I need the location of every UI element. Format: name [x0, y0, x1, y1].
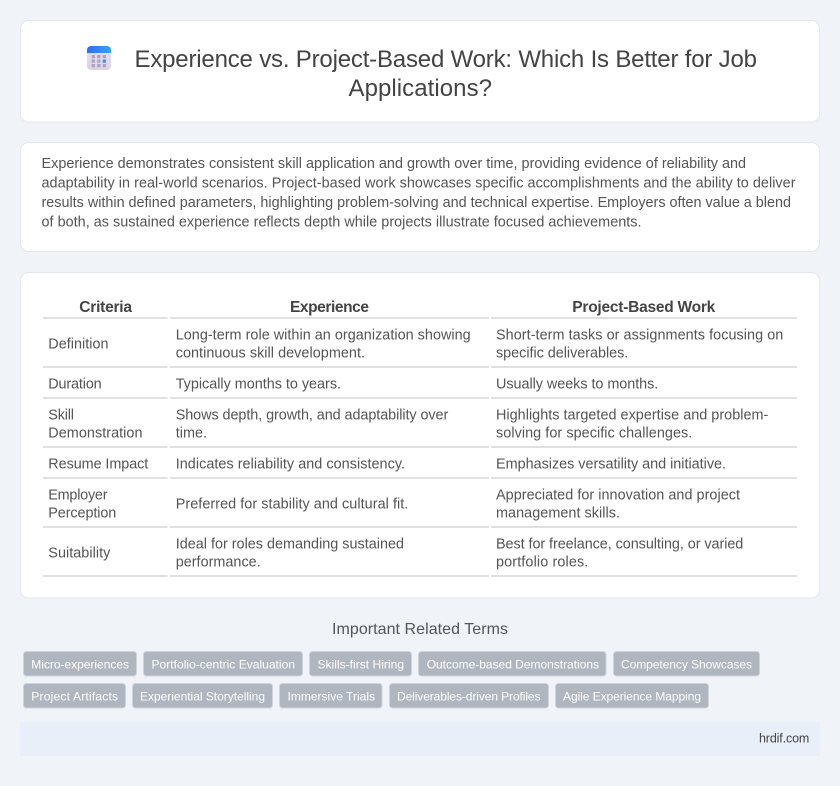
table row: definition: Definition — [48, 336, 108, 352]
table row: employer perception: Perception — [48, 505, 116, 521]
panel: comparison table — [20, 272, 820, 598]
table row: skill demonstration: Highlights targeted expertise and problem- — [496, 407, 769, 423]
table row: skill demonstration: Shows depth, growth, and adaptability over — [176, 407, 449, 423]
text block: introduction paragraph — [42, 156, 796, 230]
tag: skills-first hiring — [310, 652, 412, 676]
title — [134, 46, 757, 102]
table row: employer perception: Appreciated for innovation and project — [496, 487, 740, 503]
footer: hrdif.com — [759, 732, 809, 746]
table row: definition — [43, 327, 797, 368]
tag: portfolio-centric evaluation: Portfolio-centric Evaluation — [152, 657, 295, 671]
table row: employer perception: Preferred for stability and cultural fit. — [176, 496, 408, 512]
table header row: Experience — [290, 299, 369, 316]
text block: introduction paragraph: of both, as sustained experience reflects depth while projects illustrate focused achievements. — [42, 214, 642, 230]
table row: definition: continuous skill development. — [176, 345, 365, 361]
table row: resume impact: Indicates reliability and consistency. — [176, 456, 405, 472]
table row: resume impact: Emphasizes versatility and initiative. — [496, 456, 726, 472]
tag: immersive trials — [280, 684, 382, 708]
table row: suitability: Suitability — [48, 545, 111, 561]
text block: introduction paragraph: Experience demonstrates consistent skill application and growth over time, providing evidence of reliability and — [42, 156, 746, 172]
table row: skill demonstration: solving for specific challenges. — [496, 425, 692, 441]
title: Applications? — [348, 75, 492, 102]
table row: resume impact — [43, 456, 797, 479]
tag: deliverables-driven profiles — [390, 684, 548, 708]
table row: resume impact: Resume Impact — [48, 456, 148, 472]
tag: deliverables-driven profiles: Deliverables-driven Profiles — [397, 689, 540, 703]
title: Experience vs. Project-Based Work: Which Is Better for Job — [134, 46, 757, 73]
text block: introduction paragraph: adaptability in real-world scenarios. Project-based work showcases specific accomplishments and the ability to deliver — [42, 176, 796, 192]
tag: competency showcases — [614, 652, 760, 676]
table row: definition: specific deliverables. — [496, 345, 628, 361]
table row: skill demonstration: Skill — [48, 407, 74, 423]
table row: duration — [43, 376, 797, 399]
footer — [20, 722, 820, 756]
tag: micro-experiences: Micro-experiences — [31, 657, 129, 671]
tag: immersive trials: Immersive Trials — [288, 689, 375, 703]
table row: duration: Typically months to years. — [176, 376, 341, 392]
table header row: Project-Based Work — [572, 299, 716, 316]
table row: suitability: performance. — [176, 554, 261, 570]
table row: suitability — [43, 536, 797, 577]
tag: competency showcases: Competency Showcases — [621, 657, 752, 671]
tag: portfolio-centric evaluation — [144, 652, 302, 676]
text block: introduction paragraph: results within defined parameters, highlighting problem-solving and technical expertise. Employers often value a blend — [42, 195, 791, 211]
tag: project artifacts: Project Artifacts — [31, 689, 118, 703]
table row: duration: Duration — [48, 376, 102, 392]
table header row: Criteria — [79, 299, 132, 316]
tags: related terms — [24, 652, 760, 708]
table row: employer perception: Employer — [48, 487, 108, 503]
table row: suitability: Ideal for roles demanding sustained — [176, 536, 404, 552]
tag: micro-experiences — [24, 652, 136, 676]
tag: outcome-based demonstrations: Outcome-based Demonstrations — [427, 657, 599, 671]
tag: experiential storytelling — [132, 684, 272, 708]
table row: definition: Long-term role within an organization showing — [176, 327, 471, 343]
tag: outcome-based demonstrations — [418, 652, 606, 676]
table row: suitability: portfolio roles. — [496, 554, 588, 570]
table header row — [43, 299, 797, 319]
table row: duration: Usually weeks to months. — [496, 376, 658, 392]
tag: agile experience mapping: Agile Experience Mapping — [563, 689, 701, 703]
icon: calendar — [87, 46, 111, 70]
table row: suitability: Best for freelance, consulting, or varied — [496, 536, 743, 552]
table row: skill demonstration: Demonstration — [48, 425, 142, 441]
panel: introduction — [20, 142, 820, 252]
heading: important related terms: Important Related Terms — [332, 621, 508, 638]
table row: definition: Short-term tasks or assignments focusing on — [496, 327, 783, 343]
tag: experiential storytelling: Experiential Storytelling — [140, 689, 265, 703]
tag: project artifacts — [24, 684, 126, 708]
table row: employer perception: management skills. — [496, 505, 620, 521]
table row: skill demonstration — [43, 407, 797, 448]
tag: skills-first hiring: Skills-first Hiring — [318, 657, 404, 671]
panel: title header — [20, 20, 820, 122]
table row: skill demonstration: time. — [176, 425, 207, 441]
tag: agile experience mapping — [556, 684, 708, 708]
table row: employer perception — [43, 487, 797, 528]
